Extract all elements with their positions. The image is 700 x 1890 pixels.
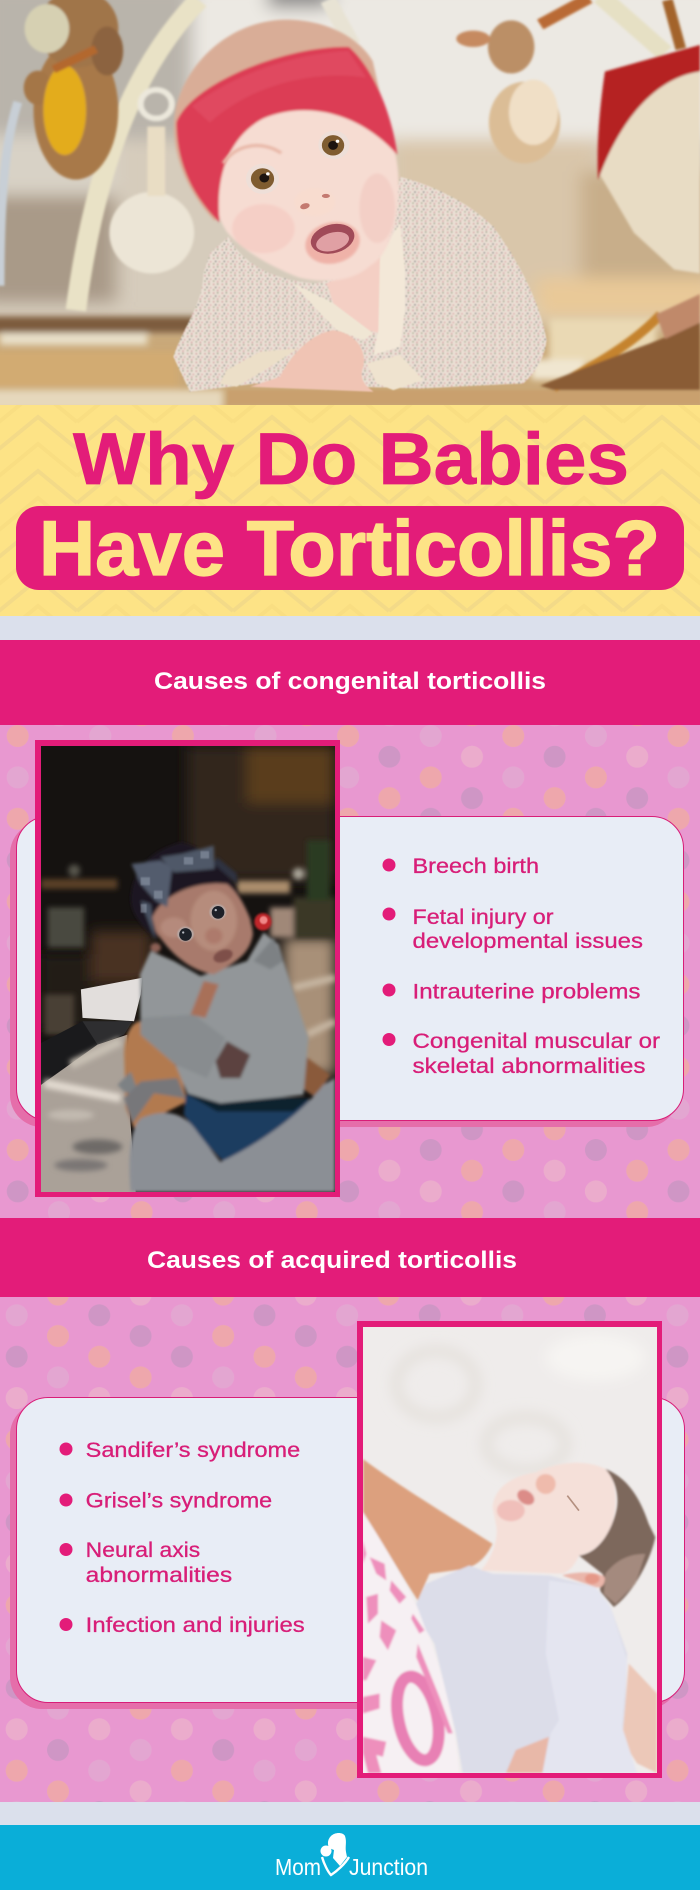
section header: congenital: [0, 640, 700, 725]
bullet list: acquired causes: Neural axis: [86, 1539, 200, 1562]
facial details: [223, 131, 366, 270]
bullet list: congenital causes: skeletal abnormalities: [412, 1055, 646, 1078]
footer bar: [0, 1825, 700, 1890]
section header: acquired: Causes of acquired torticollis: [147, 1247, 517, 1274]
logo wordmark: [275, 1854, 428, 1880]
bullet list: acquired causes: Sandifer’s syndrome: [86, 1439, 300, 1462]
logo wordmark: Mom: [275, 1854, 321, 1880]
bullet list: congenital causes: Fetal injury or: [412, 906, 554, 929]
bullet list: congenital causes: [382, 855, 660, 1078]
panel: congenital causes list: [16, 816, 684, 1121]
panel background: polka dots, congenital: [0, 725, 700, 1218]
logo: MomJunction: [275, 1833, 428, 1880]
title: line one: Why Do Babies: [73, 420, 629, 500]
photo frame: baby with plaid bow held by mother: [35, 740, 340, 1197]
panel: acquired causes list: [16, 1397, 685, 1703]
title band: yellow chevron background: [0, 405, 700, 616]
logo wordmark: Junction: [349, 1854, 428, 1880]
baby body and cardigan: [173, 177, 547, 392]
bullet list: acquired causes: Grisel’s syndrome: [86, 1490, 272, 1512]
section header: congenital: Causes of congenital torticollis: [154, 668, 546, 695]
bullet list: congenital causes: Breech birth: [412, 855, 539, 878]
bullet list: congenital causes: developmental issues: [412, 930, 643, 953]
bullet list: congenital causes: Congenital muscular or: [412, 1030, 660, 1053]
section header: acquired: [0, 1218, 700, 1297]
hero photo: baby lying on tummy with red headband: [0, 0, 700, 405]
photo frame: sleeping newborn on mother's shoulder: [357, 1321, 662, 1778]
panel background: polka dots, acquired: [0, 1297, 700, 1802]
bullet list: acquired causes: Infection and injuries: [86, 1614, 305, 1637]
logo icon: mother and child with heart: [320, 1833, 349, 1875]
bullet list: acquired causes: abnormalities: [86, 1564, 232, 1587]
bullet list: congenital causes: Intrauterine problems: [412, 980, 640, 1004]
bullet list: acquired causes: [60, 1439, 305, 1637]
